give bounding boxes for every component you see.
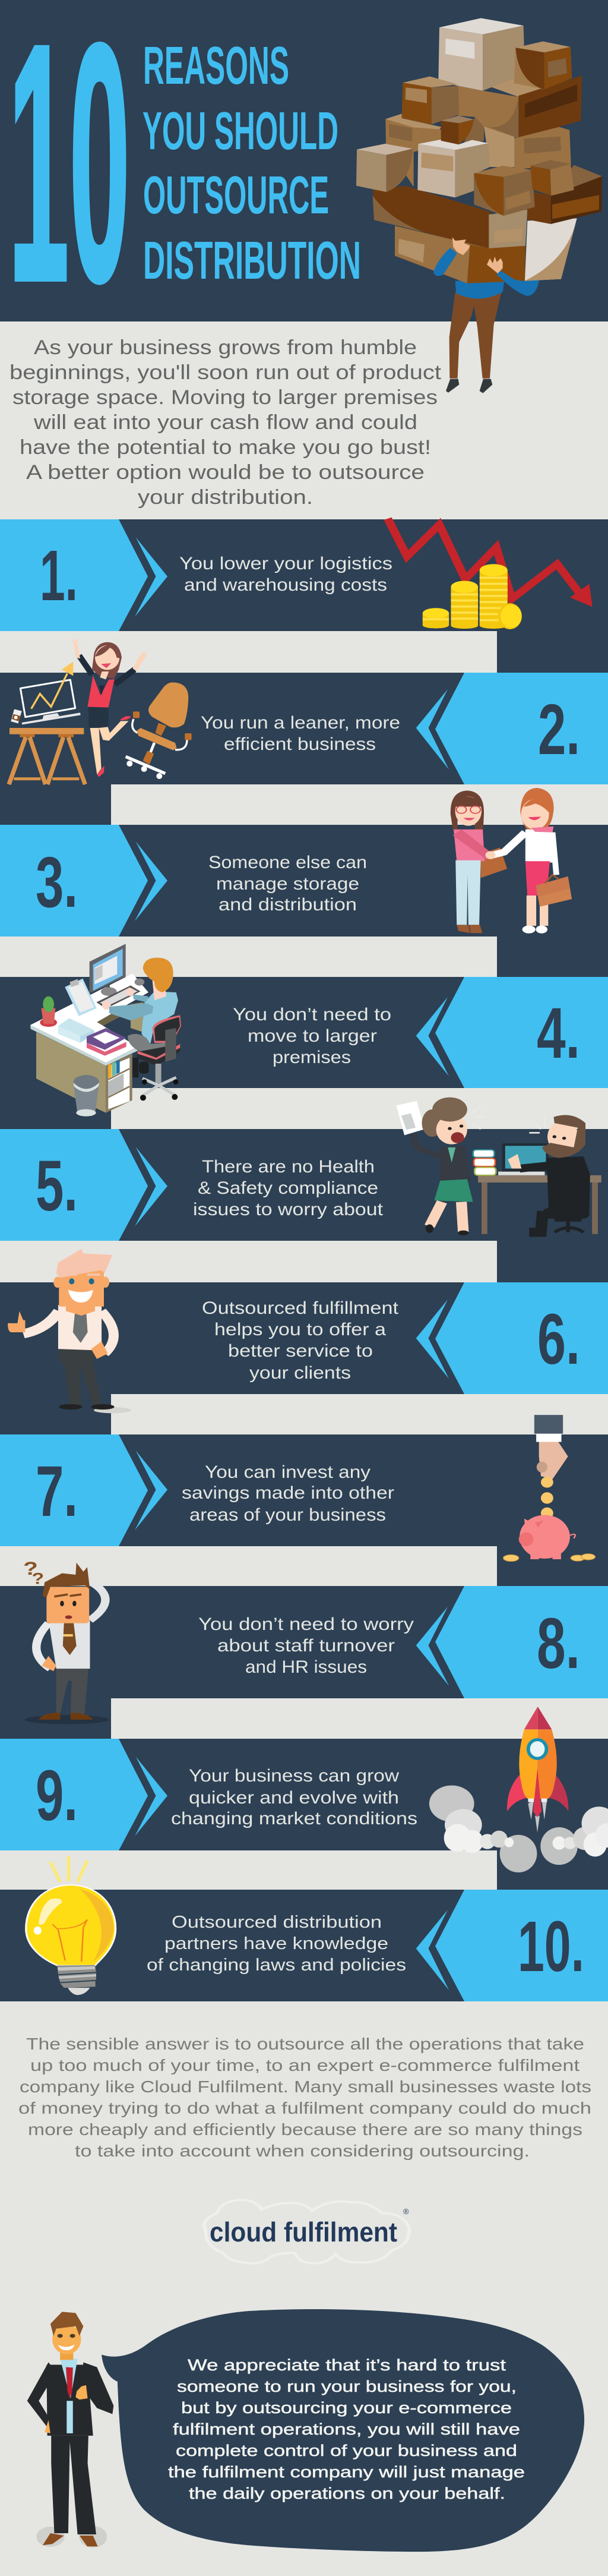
text block: sensible answer paragraph: up too much of your time, to an expert e-commerce fulfilment [30, 2056, 580, 2074]
panel: reason 10 [0, 1856, 608, 2001]
panel: reason 8 [0, 1557, 608, 1739]
text block: intro: As your business grows from humble [34, 336, 417, 359]
text: reason 6: Outsourced fulfillment [202, 1298, 398, 1318]
text: reason 9 [171, 1766, 417, 1828]
text: reason 7: You can invest any [205, 1462, 370, 1482]
callout: speech bubble: but by outsourcing your e-commerce [181, 2399, 512, 2417]
text: reason 4: premises [273, 1048, 351, 1067]
text block: sensible answer paragraph [18, 2035, 591, 2160]
callout: speech bubble: the fulfilment company will just manage [168, 2463, 525, 2481]
panel: reason 2 [0, 638, 608, 825]
illustration: two women shaking hands [451, 788, 572, 934]
panel: reason 3 [0, 788, 608, 978]
illustration: man carrying boxes [356, 18, 602, 393]
text: reason 7 [182, 1462, 394, 1525]
text: reason 9: changing market conditions [171, 1809, 417, 1828]
logo: cloud fulfilment: ® [403, 2207, 409, 2216]
text block: sensible answer paragraph: more cheaply and efficiently because there are so many things [28, 2120, 582, 2139]
number 6: 6. [537, 1298, 580, 1379]
illustration: arguing colleagues at desk [396, 1098, 601, 1235]
text: reason 2: You run a leaner, more [201, 713, 400, 733]
text: reason 7: savings made into other [182, 1483, 394, 1503]
text block: intro: your distribution. [138, 486, 313, 509]
panel: reason 9 [0, 1707, 608, 1890]
text: reason 6: helps you to offer a [214, 1320, 387, 1339]
illustration: confused man scratching head: ? [23, 1557, 38, 1579]
panel: reason 4 [0, 944, 608, 1129]
illustration: confused man scratching head: ? [32, 1570, 44, 1587]
number 3: 3. [36, 841, 78, 922]
text: reason 2: efficient business [224, 734, 376, 754]
title: reasons you should outsource distribution [142, 36, 361, 291]
text: reason 6 [202, 1298, 398, 1383]
text block: sensible answer paragraph: of money trying to do what a fulfilment company could do much [18, 2099, 591, 2117]
illustration: smiling businessman thumbs up [8, 1249, 131, 1413]
text: reason 1: You lower your logistics [179, 554, 392, 573]
logo: cloud fulfilment [204, 2200, 409, 2263]
panel: reason 5 [0, 1098, 608, 1282]
number 2: 2. [538, 689, 580, 770]
text: reason 8: and HR issues [245, 1657, 367, 1677]
text block: sensible answer paragraph: company like Cloud Fulfilment. Many small businesses waste lots [20, 2077, 591, 2096]
text: reason 2 [201, 713, 400, 754]
text: reason 5: There are no Health [202, 1157, 375, 1177]
text block: sensible answer paragraph: to take into account when considering outsourcing. [75, 2142, 530, 2160]
text block: intro: have the potential to make you go bust! [20, 436, 431, 459]
title: reasons you should outsource distribution: REASONS [143, 36, 289, 96]
callout: speech bubble: the daily operations on your behalf. [189, 2484, 505, 2502]
callout: speech bubble: We appreciate that it’s hard to trust [188, 2356, 506, 2374]
text: reason 3: manage storage [216, 874, 359, 894]
illustration: hand dropping coin in piggy bank [504, 1415, 595, 1562]
logo: cloud fulfilment: cloud fulfilment [210, 2216, 397, 2247]
text: reason 5 [193, 1157, 383, 1219]
text block: sensible answer paragraph: The sensible answer is to outsource all the operations that take [26, 2035, 584, 2053]
text: reason 3: Someone else can [208, 853, 367, 872]
panel: reason 1 [0, 519, 608, 673]
text: reason 4: move to larger [248, 1026, 377, 1046]
number 4: 4. [537, 992, 580, 1073]
text block: intro: beginnings, you'll soon run out of product [10, 361, 442, 384]
text: reason 3 [208, 853, 367, 915]
title: reasons you should outsource distribution: DISTRIBUTION [143, 231, 361, 291]
text: reason 6: better service to [228, 1341, 373, 1361]
illustration: jumping woman with desk and chair [9, 638, 192, 784]
text: reason 8: about staff turnover [217, 1636, 395, 1656]
number 5: 5. [36, 1145, 78, 1226]
number 9: 9. [36, 1755, 78, 1836]
text block: intro [10, 336, 442, 509]
illustration: businessman in suit [27, 2312, 113, 2547]
text: reason 10: Outsourced distribution [172, 1913, 382, 1932]
panel: reason 6 [0, 1249, 608, 1435]
icon: falling chart and coins [388, 519, 593, 629]
callout: speech bubble: fulfilment operations, you will still have [173, 2420, 520, 2438]
text: reason 4: You don’t need to [233, 1005, 391, 1024]
text: reason 4 [233, 1005, 391, 1067]
text: reason 8 [198, 1615, 414, 1677]
text: reason 3: and distribution [218, 895, 357, 915]
panel: reason 7 [0, 1415, 608, 1586]
callout: speech bubble: complete control of your business and [176, 2442, 517, 2460]
title: reasons you should outsource distribution: OUTSOURCE [143, 166, 329, 225]
text: reason 9: Your business can grow [189, 1766, 400, 1786]
text: reason 1 [179, 554, 392, 595]
title: reasons you should outsource distribution: YOU SHOULD [142, 102, 338, 161]
text: reason 10: of changing laws and policies [147, 1956, 406, 1975]
text: reason 8: You don’t need to worry [198, 1615, 414, 1634]
text block: intro: A better option would be to outsource [26, 461, 425, 484]
number 1: 1. [40, 535, 78, 616]
text block: intro: will eat into your cash flow and could [33, 411, 417, 434]
text: reason 10 [147, 1913, 406, 1975]
illustration: man working at office desk [30, 944, 181, 1117]
number 7: 7. [36, 1451, 78, 1531]
icon: light bulb [26, 1856, 116, 1995]
number 8: 8. [537, 1603, 580, 1683]
text: reason 9: quicker and evolve with [189, 1788, 399, 1808]
text: reason 7: areas of your business [189, 1505, 386, 1525]
illustration: confused man scratching head [23, 1557, 109, 1724]
text: reason 6: your clients [249, 1363, 351, 1383]
text: reason 5: issues to worry about [193, 1200, 383, 1219]
panel: header [0, 0, 608, 352]
callout: speech bubble: someone to run your business for you, [177, 2378, 517, 2395]
text: reason 1: and warehousing costs [184, 575, 387, 595]
text block: intro: storage space. Moving to larger premises [12, 386, 438, 409]
text: reason 10: partners have knowledge [164, 1934, 388, 1953]
text: reason 5: & Safety compliance [198, 1178, 378, 1198]
illustration: rocket and smoke clouds [429, 1707, 608, 1872]
callout: speech bubble [102, 2309, 584, 2552]
